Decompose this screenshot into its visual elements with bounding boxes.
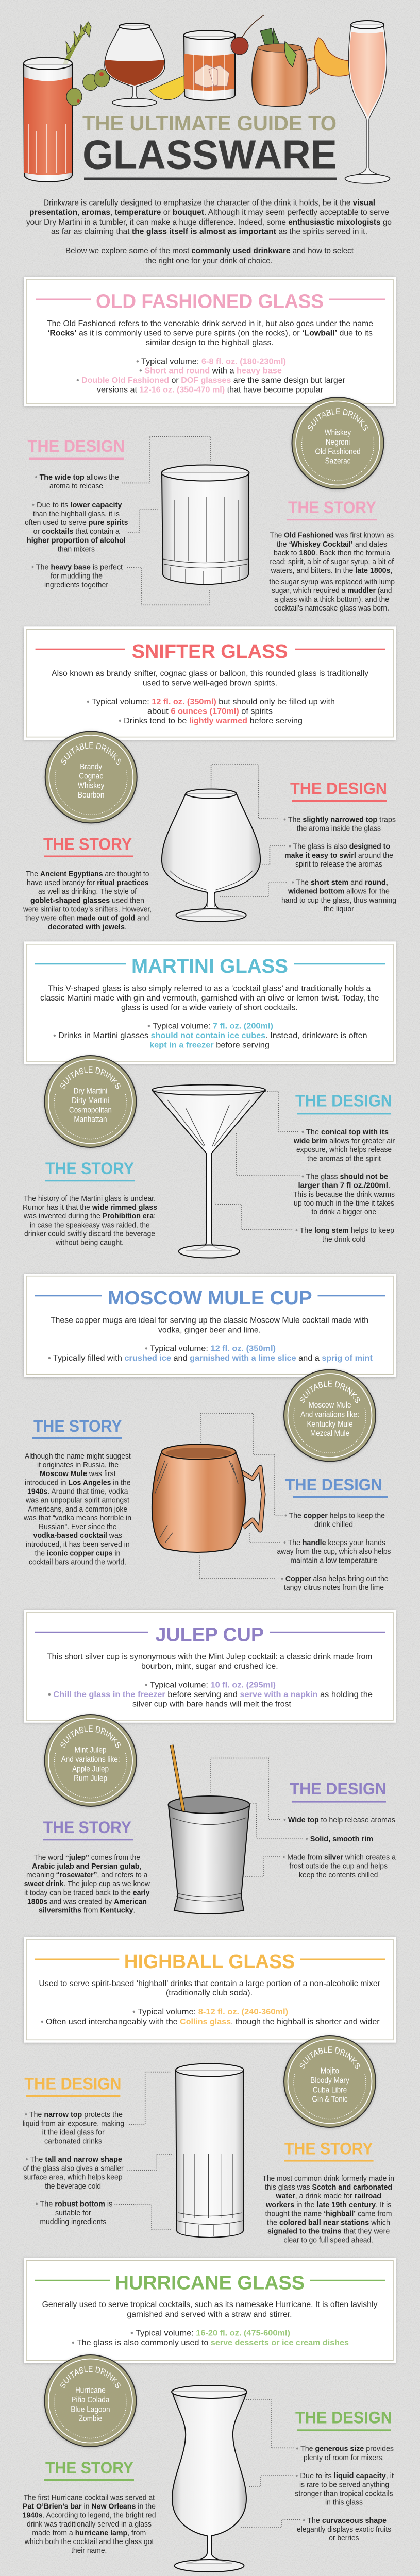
heading: the story: THE STORY — [45, 1159, 134, 1178]
illustration: martini glass — [152, 1085, 265, 1258]
panel: highball: HIGHBALL GLASS — [124, 1951, 295, 1973]
text: design notes: • The glass is also designed to — [289, 842, 390, 851]
text: design notes: the aromas of the spirit — [307, 1155, 381, 1163]
text: story: the ‘Whiskey Cocktail’ and dates — [277, 540, 387, 549]
text: design notes: • The handle keeps your hands — [283, 1538, 385, 1547]
heading: the design: THE DESIGN — [285, 1476, 382, 1494]
connector: swirl — [262, 846, 285, 865]
panel: hurricane: HURRICANE GLASS — [114, 2272, 305, 2294]
connector: heavy base — [127, 568, 210, 605]
connector: not larger — [236, 1133, 300, 1176]
text: design notes: larger than 7 fl oz./200ml. — [298, 1181, 390, 1190]
heading: the story: THE STORY — [288, 498, 376, 517]
heading: the story: THE STORY — [45, 2459, 133, 2477]
text: design notes: tangy citrus notes from the lime — [284, 1583, 384, 1592]
text: story: drinker could swiftly discard the beverage — [24, 1230, 155, 1239]
text: story: Rumor has it that the wide rimmed glass — [23, 1203, 157, 1212]
text: story: without being caught. — [55, 1239, 124, 1247]
panel: old fashioned: ‘Rocks’ as it is commonly used to serve pure spirits (on the rocks), or ‘Lowball’ due to its — [47, 329, 373, 337]
text: story: it originates in Russia, the — [37, 1461, 119, 1469]
intro text: as far as claiming that the glass itself is almost as important as the spirits served in it. — [51, 228, 367, 236]
section: moscow mule cup — [23, 1273, 397, 1592]
connector: short stem — [219, 882, 287, 896]
text: story: back to 1800. Back then the formula — [274, 549, 391, 557]
heading: the design: THE DESIGN — [295, 2408, 392, 2427]
illustration: snifter glass — [162, 789, 260, 922]
text: design notes — [281, 815, 396, 913]
text: design notes: • The narrow top protects the — [25, 2110, 123, 2119]
panel: hurricane: • The glass is also commonly used to serve desserts or ice cream dishes — [72, 2338, 349, 2347]
panel: julep: • Chill the glass in the freezer before serving and serve with a napkin as holding the — [48, 1690, 373, 1699]
badge: suitable drinks moscow mule: SUITABLE DRINKS — [300, 1381, 360, 1403]
connector: generous size — [246, 2399, 295, 2448]
text: design notes: than mixers — [58, 545, 95, 553]
badge: suitable drinks highball: Cuba Libre — [313, 2086, 347, 2095]
connector: tall shape — [127, 2154, 172, 2171]
panel: moscow mule: • Typically filled with crushed ice and garnished with a lime slice and a sprig of mint — [48, 1354, 373, 1363]
heading: the design: THE DESIGN — [295, 1092, 392, 1110]
text: story — [262, 2174, 394, 2245]
panel: snifter: SNIFTER GLASS — [132, 641, 288, 663]
drink: snifter — [105, 23, 165, 107]
section: highball glass — [23, 1937, 396, 2245]
text: design notes: higher proportion of alcohol — [27, 536, 126, 545]
connector: wide top — [122, 436, 211, 483]
panel: julep: JULEP CUP — [156, 1624, 264, 1646]
text: story: 1940s. Around that time, vodka — [27, 1487, 128, 1496]
text: design notes — [293, 1128, 395, 1244]
text: design notes: to drink a bigger one — [311, 1208, 376, 1216]
badge: suitable drinks martini: Dirty Martini — [72, 1096, 109, 1105]
text: story: drink was traditionally served in a glass — [27, 2520, 152, 2529]
badge: suitable drinks hurricane: Hurricane — [75, 2386, 106, 2395]
text: story — [23, 1452, 131, 1567]
panel: julep: This short silver cup is synonymous with the Mint Julep cocktail: a classic drink made from — [47, 1653, 372, 1662]
text: design notes: • The heavy base is perfect — [31, 563, 123, 572]
panel: julep: bourbon, mint, sugar and crushed ice. — [141, 1662, 278, 1671]
text: design notes: • The glass should not be — [301, 1173, 388, 1181]
text: design notes — [25, 473, 128, 589]
text: design notes — [282, 1816, 396, 1879]
text: story: was invented during the Prohibition era: — [23, 1212, 156, 1221]
panel: snifter — [24, 626, 396, 740]
badge: suitable drinks hurricane: Zombie — [79, 2415, 102, 2424]
intro text: Below we explore some of the most commonly used drinkware and how to select — [65, 247, 354, 256]
intro text: your Dry Martini in a tumbler, it can make a huge difference. Indeed, some enthusiastic mixologists go — [26, 218, 392, 227]
text: design notes: aroma to release — [49, 482, 103, 490]
heading: the design: THE DESIGN — [24, 2075, 121, 2093]
text: story: cocktail’s namesake glass was born. — [274, 604, 389, 613]
badge: suitable drinks snifter — [43, 730, 139, 825]
panel: hurricane: garnished and served with a straw and stirrer. — [127, 2310, 292, 2319]
text: design notes: • Solid, smooth rim — [306, 1835, 373, 1843]
panel: old fashioned — [24, 277, 396, 406]
text: story: Pat O’Brien’s bar in New Orleans in the — [23, 2502, 156, 2511]
text: design notes: • The curvaceous shape — [303, 2516, 387, 2525]
text: story — [24, 1853, 150, 1914]
text: design notes — [277, 1511, 391, 1592]
garnish: olives — [83, 70, 110, 91]
badge: suitable drinks old fashioned: SUITABLE DRINKS — [308, 408, 368, 431]
text: story: cocktail bars around the world. — [29, 1558, 126, 1567]
section: martini glass — [23, 941, 397, 1258]
text: story: the iconic copper cups in — [35, 1549, 120, 1558]
text: story: goblet-shaped glasses used then — [30, 896, 144, 905]
panel: martini: • Typical volume: 7 fl. oz. (200ml) — [147, 1022, 273, 1031]
text: design notes: • Copper also helps bring out the — [281, 1574, 389, 1583]
text: story: sweet drink. The julep cup as we know — [24, 1879, 150, 1888]
panel: hurricane: Generally used to serve tropical cocktails, such as its namesake Hurricane. It is often lavishly — [42, 2300, 377, 2309]
text: design notes: • The copper helps to keep the — [284, 1511, 385, 1520]
panel: julep: silver cup with bare hands will melt the frost — [132, 1700, 292, 1708]
garnish: peach slice — [314, 38, 358, 76]
panel: snifter: • Typical volume: 12 fl. oz. (350ml) but should only be filled up with — [87, 698, 335, 706]
panel: old fashioned: versions at 12-16 oz. (350-470 ml) that have become popular — [97, 385, 324, 394]
text: design notes: or berries — [329, 2534, 359, 2543]
text: story: was that “vodka means horrible in — [23, 1514, 131, 1522]
text: story — [23, 1194, 157, 1247]
text: story: clear to go full speed ahead. — [283, 2236, 373, 2245]
garnish: lemon wedge — [149, 74, 189, 100]
panel: highball: • Often used interchangeably with the Collins glass, though the highball is shorter and wider — [41, 2018, 380, 2026]
badge: suitable drinks highball — [284, 2036, 376, 2127]
text: story: meaning “rosewater”, and refers to a — [26, 1871, 148, 1879]
illustration: hurricane glass — [172, 2385, 247, 2572]
panel: martini: This V-shaped glass is also simply referred to as a ‘cocktail glass’ and traditionally holds a — [48, 984, 371, 993]
panel: snifter: used to serve well-aged brown spirits. — [143, 679, 277, 688]
badge: suitable drinks old fashioned: Old Fashioned — [315, 447, 361, 456]
text: story: water, a drink made for railroad — [275, 2192, 381, 2200]
badge: suitable drinks martini — [43, 1054, 138, 1150]
connector: lower capacity — [128, 510, 158, 532]
connector: copper — [200, 1413, 282, 1515]
text: design notes: ingredients together — [44, 581, 108, 589]
panel: old fashioned: • Typical volume: 6-8 fl. oz. (180-230ml) — [136, 357, 286, 366]
text: design notes: the liquor — [324, 905, 354, 913]
badge: suitable drinks julep: Mint Julep — [75, 1746, 107, 1755]
text: story: it today can be traced back to the early — [24, 1888, 150, 1897]
text: story: Although the name might suggest — [25, 1452, 131, 1461]
text: story: The Ancient Egyptians are thought to — [26, 870, 149, 878]
text: design notes: • Due to its liquid capacity, it — [295, 2471, 394, 2480]
connector: narrow top — [129, 2072, 172, 2125]
illustration: julep cup with straw — [168, 1745, 249, 1914]
text: design notes: muddling ingredients — [40, 2217, 106, 2226]
text: design notes: maintain a low temperature — [291, 1556, 377, 1565]
text: design notes: • The tall and narrow shape — [25, 2155, 122, 2164]
text: story: vodka-based cocktail was — [33, 1531, 122, 1540]
text: story: 1800s and was created by American — [27, 1897, 147, 1906]
intro text — [26, 198, 392, 265]
text: design notes: • The robust bottom is — [36, 2200, 112, 2209]
text: design notes: than the highball glass, it is — [33, 510, 120, 518]
connector: long stem — [215, 1205, 293, 1229]
text: story: thought the name ‘highball’ came from — [265, 2209, 392, 2218]
text: story: they were often made out of gold and — [25, 914, 149, 923]
connector: wide top — [210, 1758, 281, 1819]
connector: smooth rim — [250, 1803, 304, 1838]
text: design notes: • The short stem and round, — [292, 878, 388, 887]
badge: suitable drinks moscow mule: Kentucky Mule — [307, 1420, 353, 1429]
badge: suitable drinks highball: Gin & Tonic — [312, 2095, 348, 2104]
badge: suitable drinks snifter: Cognac — [79, 772, 104, 781]
text: story: introduced, it has been served in — [26, 1540, 130, 1549]
connector: citrus notes — [199, 1556, 276, 1579]
badge: suitable drinks hurricane: SUITABLE DRINKS — [60, 2366, 121, 2388]
panel: julep: • Typical volume: 10 fl. oz. (295ml) — [145, 1681, 276, 1690]
text: story: silversmiths from Kentucky. — [39, 1906, 136, 1914]
heading: the story: THE STORY — [43, 835, 132, 853]
badge: suitable drinks martini: Cosmopolitan — [69, 1106, 112, 1115]
text: story: The first Hurricane cocktail was served at — [24, 2493, 155, 2502]
panel: moscow mule: MOSCOW MULE CUP — [108, 1287, 312, 1309]
text: story: sugar, which required a muddler (and — [272, 586, 392, 595]
badge: suitable drinks julep: SUITABLE DRINKS — [60, 1725, 121, 1748]
panel: old fashioned: OLD FASHIONED GLASS — [96, 291, 324, 312]
text: design notes: • Made from silver which creates a — [282, 1853, 396, 1862]
text: design notes: elegantly displays exotic fruits — [297, 2525, 391, 2534]
text: story: signaled to the trains that they were — [267, 2227, 390, 2236]
panel: moscow mule — [24, 1274, 396, 1377]
panel: highball: Used to serve spirit-based ‘highball’ drinks that contain a large portion of a non-alcoholic mixer — [39, 1979, 381, 1988]
panel: old fashioned: • Short and round with a heavy base — [139, 367, 282, 376]
badge: suitable drinks old fashioned — [290, 396, 385, 492]
connector: narrowed top — [211, 765, 278, 819]
badge: suitable drinks julep — [45, 1715, 137, 1806]
intro text: the right one for your drink of choice. — [145, 257, 273, 265]
text: design notes: often used to serve pure spirits — [25, 518, 128, 527]
section: hurricane glass — [23, 2258, 396, 2572]
text: design notes: wide brim allows for greater air — [293, 1137, 395, 1145]
text: design notes: in this glass — [325, 2498, 363, 2507]
panel: martini — [24, 941, 396, 1064]
badge: suitable drinks old fashioned: Negroni — [326, 438, 350, 447]
badge: suitable drinks old fashioned: Whiskey — [325, 429, 351, 437]
panel: old fashioned: • Double Old Fashioned or DOF glasses are the same design but larger — [76, 376, 346, 385]
intro text: presentation, aromas, temperature or bouquet. Although it may seem perfectly acceptable to serve — [29, 208, 389, 217]
text: story: as well as drinking. The style of — [38, 887, 137, 896]
text: design notes: the drink cold — [322, 1235, 366, 1244]
text: story: their name. — [71, 2546, 107, 2555]
text: design notes — [295, 2445, 394, 2543]
badge: suitable drinks martini: SUITABLE DRINKS — [60, 1066, 121, 1089]
text: story: Russian”. Ever since the — [39, 1522, 117, 1531]
panel: snifter: Also known as brandy snifter, cognac glass or balloon, this rounded glass is traditionally — [52, 669, 368, 678]
text: design notes: for muddling the — [51, 572, 103, 581]
text: design notes: • Due to its lower capacity — [32, 501, 122, 510]
text: story: in case the speakeasy was raided, the — [30, 1221, 150, 1229]
text: story: Americans, and a common joke — [28, 1505, 127, 1514]
text: design notes: spirit to release the aromas — [295, 860, 382, 869]
heading: the story: THE STORY — [43, 1818, 131, 1837]
title: THE ULTIMATE GUIDE TO — [82, 112, 337, 135]
text: design notes: is rare to be served anything — [299, 2480, 389, 2489]
badge: suitable drinks moscow mule: Mezcal Mule — [310, 1429, 349, 1438]
text: design notes: surface area, which helps keep — [24, 2173, 123, 2182]
text: design notes: make it easy to swirl around the — [284, 851, 393, 860]
badge: suitable drinks snifter: Whiskey — [78, 782, 105, 790]
heading: the design: THE DESIGN — [28, 437, 125, 455]
panel: hurricane: • Typical volume: 16-20 fl. oz. (475-600ml) — [130, 2329, 290, 2338]
badge: suitable drinks old fashioned: Sazerac — [325, 457, 351, 466]
panel: snifter: about 6 ounces (170ml) of spirits — [147, 707, 273, 716]
text: design notes: suitable for — [55, 2209, 91, 2217]
text: design notes: the beverage cold — [45, 2182, 101, 2191]
section: julep cup — [24, 1610, 396, 1914]
title: GLASSWARE — [82, 132, 337, 177]
panel: hurricane — [24, 2258, 396, 2363]
text: design notes: stronger than tropical cocktails — [295, 2489, 393, 2498]
text: design notes: of the glass also gives a smaller — [23, 2164, 124, 2173]
text: design notes: • The wide top allows the — [35, 473, 119, 482]
text: design notes: drink chilled — [314, 1520, 353, 1529]
section: snifter glass — [23, 625, 397, 931]
panel: highball: (traditionally club soda). — [166, 1989, 253, 1997]
panel: martini: kept in a freezer before serving — [149, 1041, 270, 1049]
text: story: decorated with jewels. — [48, 923, 127, 931]
panel: martini: classic Martini made with gin and vermouth, garnished with an olive or lemon twist. Today, the — [40, 994, 379, 1003]
text: story: introduced in Los Angeles in the — [25, 1479, 131, 1487]
text: story: the colored ball near stations which — [267, 2218, 390, 2227]
panel: old fashioned: similar design to the highball glass. — [146, 338, 274, 347]
text: design notes: plenty of room for mixers. — [304, 2453, 384, 2462]
badge: suitable drinks moscow mule — [282, 1368, 377, 1464]
text: story: read: spirit, a bit of sugar syrup, a bit of — [270, 557, 394, 566]
text: design notes: or cocktails that contain a — [33, 527, 120, 536]
text: story: The Old Fashioned was first known as — [270, 531, 394, 540]
text: story: were similar to today’s snifters. However, — [23, 905, 152, 914]
text: design notes: exposure, which helps release — [296, 1145, 392, 1154]
heading: the design: THE DESIGN — [290, 1780, 387, 1798]
text: story — [23, 2493, 156, 2555]
text: design notes: keep the contents chilled — [299, 1871, 378, 1879]
text: design notes: • The slightly narrowed top traps — [283, 815, 396, 824]
badge: suitable drinks highball: Mojito — [321, 2067, 339, 2076]
panel: martini: glass is used for a wide variety of short cocktails. — [121, 1003, 298, 1012]
text: design notes: up too much in the time it takes — [294, 1199, 394, 1208]
connector: liquid capacity — [249, 2476, 293, 2486]
badge: suitable drinks martini: Manhattan — [74, 1115, 107, 1124]
connector: handle — [249, 1533, 280, 1543]
text: design notes: • Wide top to help release aromas — [283, 1816, 395, 1824]
illustration: copper mug — [152, 1445, 263, 1552]
badge: suitable drinks julep: Apple Julep — [72, 1765, 109, 1774]
header illustration: cocktails — [24, 15, 390, 183]
text: story: was an unpopular spirit amongst — [25, 1496, 130, 1505]
text: story: have used brandy for ritual practices — [27, 878, 148, 887]
badge: suitable drinks julep: And variations like: — [61, 1755, 120, 1764]
text: story: 1940s. According to legend, the bright red — [23, 2511, 156, 2520]
text: story: a glass with a thick bottom), and the — [274, 595, 389, 604]
text: design notes: hand to cup the glass, thus warming — [281, 896, 396, 905]
panel: julep — [24, 1610, 396, 1723]
text: story: which both the cocktail and the glass got — [24, 2537, 154, 2546]
connector: conical top — [265, 1091, 299, 1132]
text: story: Arabic julab and Persian gulab, — [32, 1862, 141, 1871]
text: design notes: away from the cup, which also helps — [277, 1547, 391, 1556]
panel: highball — [24, 1937, 396, 2043]
panel: moscow mule: • Typical volume: 12 fl. oz. (350ml) — [145, 1345, 276, 1353]
text: design notes: liquid from air exposure, making — [23, 2119, 124, 2128]
text: story: workers in the late 19th century. It is — [265, 2200, 391, 2209]
connector: silver — [243, 1857, 281, 1876]
panel: moscow mule: These copper mugs are ideal for serving up the classic Moscow Mule cocktail made with — [51, 1316, 368, 1325]
badge: suitable drinks martini: Dry Martini — [74, 1087, 107, 1096]
heading: the story: THE STORY — [33, 1417, 122, 1435]
badge: suitable drinks moscow mule: And variations like: — [300, 1411, 359, 1419]
panel: snifter: • Drinks tend to be lightly warmed before serving — [119, 717, 303, 725]
panel: martini: MARTINI GLASS — [131, 956, 288, 977]
badge: suitable drinks snifter: SUITABLE DRINKS — [61, 742, 121, 765]
text: story: the sugar syrup was replaced with lump — [269, 578, 395, 586]
text: design notes: the aroma inside the glass — [297, 824, 381, 833]
text: story — [23, 870, 152, 931]
illustration: old fashioned glass — [162, 465, 249, 585]
panel: old fashioned: The Old Fashioned refers to the venerable drink served in it, but also goes under the name — [47, 319, 373, 328]
title — [82, 112, 337, 180]
panel: martini: • Drinks in Martini glasses should not contain ice cubes. Instead, drinkware is often — [53, 1031, 367, 1040]
badge: suitable drinks hurricane: Piña Colada — [71, 2396, 110, 2404]
panel: moscow mule: vodka, ginger beer and lime. — [158, 1326, 261, 1334]
badge: suitable drinks hurricane — [44, 2355, 136, 2447]
badge: suitable drinks highball: Bloody Mary — [310, 2076, 349, 2085]
drink: champagne flute — [345, 21, 390, 183]
text: design notes: it the ideal glass for — [42, 2128, 105, 2137]
heading: the story: THE STORY — [284, 2140, 373, 2158]
panel: highball: • Typical volume: 8-12 fl. oz. (240-360ml) — [132, 2008, 288, 2016]
badge: suitable drinks moscow mule: Moscow Mule — [308, 1401, 351, 1410]
text: story: this glass was Scotch and carbonated — [265, 2183, 392, 2192]
section: old fashioned glass — [23, 276, 397, 613]
drink: old fashioned — [183, 30, 235, 100]
text: design notes — [23, 2110, 124, 2226]
text: design notes: • The conical top with its — [301, 1128, 389, 1137]
badge: suitable drinks snifter: Brandy — [80, 762, 103, 771]
intro text: Drinkware is carefully designed to emphasize the character of the drink it holds, be it the visual — [43, 198, 375, 207]
text: design notes: frost outside the cup and helps — [289, 1862, 388, 1871]
text: story: The most common drink formerly made in — [262, 2174, 394, 2183]
text: design notes: • The long stem helps to keep — [295, 1226, 394, 1235]
badge: suitable drinks snifter: Bourbon — [78, 791, 104, 800]
text: design notes: This is because the drink warms — [293, 1190, 395, 1199]
connector: curvaceous shape — [241, 2520, 301, 2528]
text: story: The word “julep” comes from the — [34, 1853, 140, 1862]
drink: moscow mule mug — [252, 28, 318, 106]
badge: suitable drinks hurricane: Blue Lagoon — [71, 2405, 110, 2414]
illustration: highball glass — [176, 2064, 244, 2238]
garnish: cherry — [231, 15, 264, 55]
text: story: The history of the Martini glass is unclear. — [24, 1194, 156, 1203]
heading: the design: THE DESIGN — [290, 779, 387, 798]
text: story: waters, and bitters. In the late 1800s, — [271, 566, 393, 575]
text: design notes: widened bottom allows for the — [288, 887, 390, 896]
text: design notes: • The generous size provides — [296, 2445, 394, 2453]
drink: bloody mary highball — [24, 22, 91, 182]
text: design notes: carbonated drinks — [44, 2137, 102, 2146]
text: story — [269, 531, 395, 613]
text: story: Moscow Mule was first — [40, 1469, 116, 1478]
badge: suitable drinks highball: SUITABLE DRINKS — [300, 2046, 360, 2069]
badge: suitable drinks julep: Rum Julep — [74, 1774, 107, 1783]
connector: robust bottom — [114, 2204, 172, 2229]
text: story: made from a hurricane lamp, from — [32, 2529, 146, 2537]
